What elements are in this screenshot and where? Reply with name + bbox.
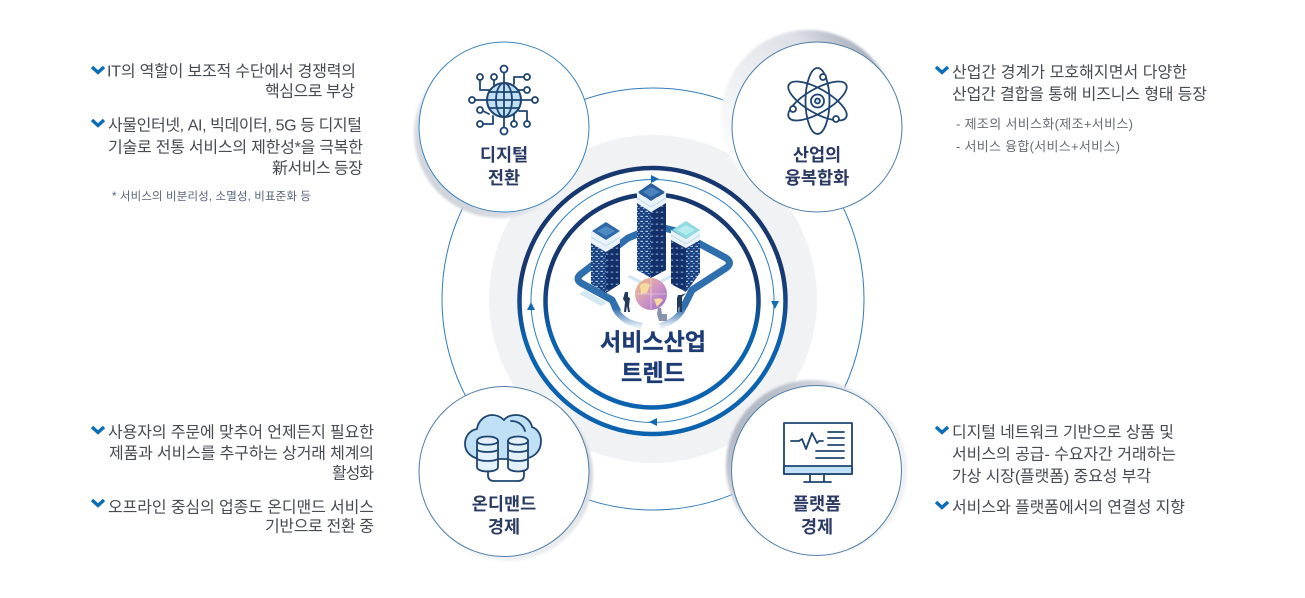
bullet chevron <box>936 502 948 508</box>
middle tower <box>637 203 651 278</box>
text block: industry convergence: - 제조의 서비스화(제조+서비스) <box>956 116 1133 132</box>
icon: monitor <box>784 423 852 482</box>
topic: platform economy <box>726 380 907 556</box>
text block: industry convergence: - 서비스 융합(서비스+서비스) <box>956 139 1120 154</box>
topic: digital transformation: 전환 <box>488 168 520 188</box>
bullet chevron <box>92 67 104 72</box>
topic: platform economy: 경제 <box>801 517 833 537</box>
bullet chevron <box>92 500 104 506</box>
right tower <box>671 240 686 292</box>
background disc <box>489 135 817 463</box>
topic: industry convergence: 융복합화 <box>785 168 849 188</box>
illustration: data center towers <box>578 183 730 326</box>
text block: digital transformation: 新서비스 등장 <box>272 160 363 178</box>
text block: platform economy: 서비스와 플랫폼에서의 연결성 지향 <box>952 498 1185 516</box>
text block: on-demand economy: 제품과 서비스를 추구하는 상거래 체계의 <box>109 444 374 462</box>
bullet chevron <box>936 67 948 72</box>
text block: industry convergence: 산업간 결합을 통해 비즈니스 형태 등장 <box>952 86 1207 104</box>
text block: platform economy: 서비스의 공급- 수요자간 거래하는 <box>952 446 1176 464</box>
topic: on-demand economy: 경제 <box>488 517 520 537</box>
icon: globe network <box>469 66 538 134</box>
topic: digital transformation <box>414 42 589 218</box>
outer ring <box>520 168 786 434</box>
bullet chevron <box>92 427 104 432</box>
label: 디지털 <box>480 145 528 165</box>
center title <box>600 329 706 386</box>
left tower <box>591 243 606 293</box>
bullet chevron <box>936 427 948 432</box>
bullet chevron <box>92 120 104 126</box>
text block: digital transformation: 핵심으로 부상 <box>265 82 355 100</box>
thin flow ring <box>531 180 774 422</box>
orbit ring <box>442 88 864 510</box>
tower pads <box>579 290 607 306</box>
flow arrows <box>527 175 779 426</box>
center emblem <box>518 166 787 436</box>
inner ring <box>546 194 758 408</box>
center title: 트렌드 <box>621 360 685 386</box>
people <box>623 292 630 312</box>
text block: on-demand economy: 사용자의 주문에 맞추어 언제든지 필요한 <box>108 424 374 442</box>
label: 산업의 <box>793 145 841 165</box>
topic: on-demand economy <box>419 386 593 561</box>
label: 플랫폼 <box>793 494 841 514</box>
text block: digital transformation <box>92 62 363 203</box>
globe <box>635 278 667 310</box>
road loop <box>578 233 640 312</box>
text block: digital transformation: 사물인터넷, AI, 빅데이터, 5G 등 디지털 <box>108 116 362 134</box>
icon: atom <box>783 68 852 134</box>
text block: on-demand economy: 기반으로 전환 중 <box>265 518 374 536</box>
text block: industry convergence: 산업간 경계가 모호해지면서 다양한 <box>952 64 1187 82</box>
text block: platform economy: 가상 시장(플랫폼) 중요성 부각 <box>952 468 1151 486</box>
text block: platform economy <box>936 424 1185 516</box>
icon: cloud database <box>465 415 541 481</box>
text block: digital transformation: IT의 역할이 보조적 수단에서 경쟁력의 <box>107 62 356 80</box>
text block: digital transformation: * 서비스의 비분리성, 소멸성, 비표준화 등 <box>112 190 311 203</box>
text block: digital transformation: 기술로 전통 서비스의 제한성*을 극복한 <box>108 138 363 156</box>
text block: on-demand economy: 오프라인 중심의 업종도 온디맨드 서비스 <box>108 498 374 516</box>
text block: on-demand economy <box>92 424 374 536</box>
center title: 서비스산업 <box>600 329 706 355</box>
topic: industry convergence <box>721 30 902 212</box>
text block: platform economy: 디지털 네트워크 기반으로 상품 및 <box>952 424 1174 442</box>
text block: industry convergence <box>936 64 1207 154</box>
text block: on-demand economy: 활성화 <box>332 464 374 482</box>
label: 온디맨드 <box>472 494 536 514</box>
